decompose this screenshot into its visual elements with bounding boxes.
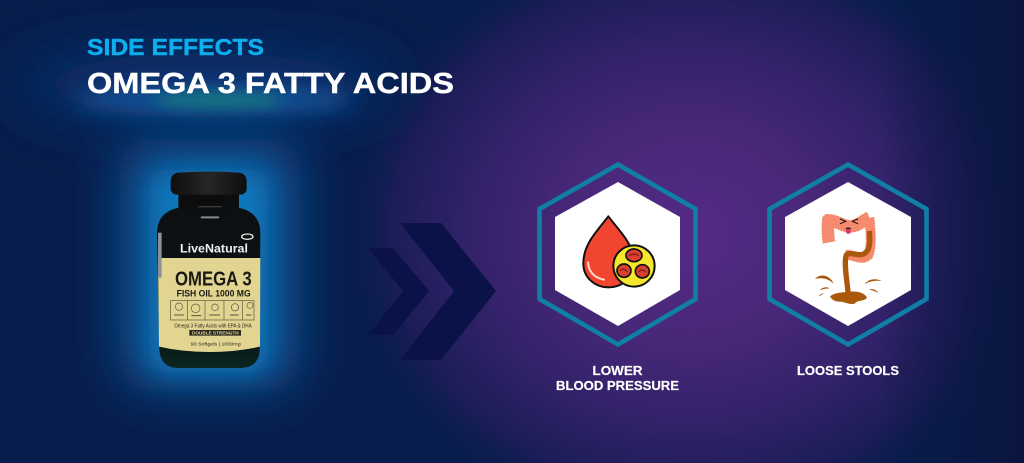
label: lower blood pressure: [556, 364, 679, 393]
product bottle: Omega 3 Fatty Acids with EPA & DHA: [174, 324, 252, 330]
product bottle: FISH OIL 1000 MG: [177, 289, 251, 299]
stool puddle: [830, 291, 867, 304]
bottle body: [157, 207, 260, 368]
hexagon frame: [770, 164, 926, 344]
bottle label: [158, 258, 260, 352]
icon: blood drop with cells: [583, 216, 655, 287]
heading: omega 3 fatty acids: OMEGA 3 FATTY ACIDS: [87, 68, 454, 100]
white hexagon: [555, 182, 680, 326]
white hexagon: [785, 182, 911, 326]
label: lower blood pressure: BLOOD PRESSURE: [556, 379, 679, 393]
bottle neck: [178, 192, 239, 210]
label: loose stools: LOOSE STOOLS: [797, 364, 899, 378]
heading: side effects: SIDE EFFECTS: [87, 34, 264, 60]
product bottle: OMEGA 3: [175, 268, 252, 290]
panel: loose stools: [770, 164, 926, 378]
icon: intestine with stool: [815, 218, 882, 304]
product bottle: LiveNatural: [180, 242, 248, 256]
product bottle: [157, 172, 260, 368]
panel: lower blood pressure: [540, 164, 696, 393]
intestine: [828, 218, 871, 258]
bottle cap: [171, 172, 247, 195]
product bottle: 90 Softgels | 1000mg: [191, 341, 241, 347]
label: lower blood pressure: LOWER: [592, 364, 642, 378]
splashes: [815, 276, 882, 296]
face: [840, 219, 858, 224]
product bottle: DOUBLE STRENGTH: [192, 330, 239, 335]
bottle highlights: [198, 206, 222, 207]
hexagon frame: [540, 164, 696, 344]
stool stream: [845, 231, 870, 294]
arrow: double chevron: [368, 223, 496, 360]
